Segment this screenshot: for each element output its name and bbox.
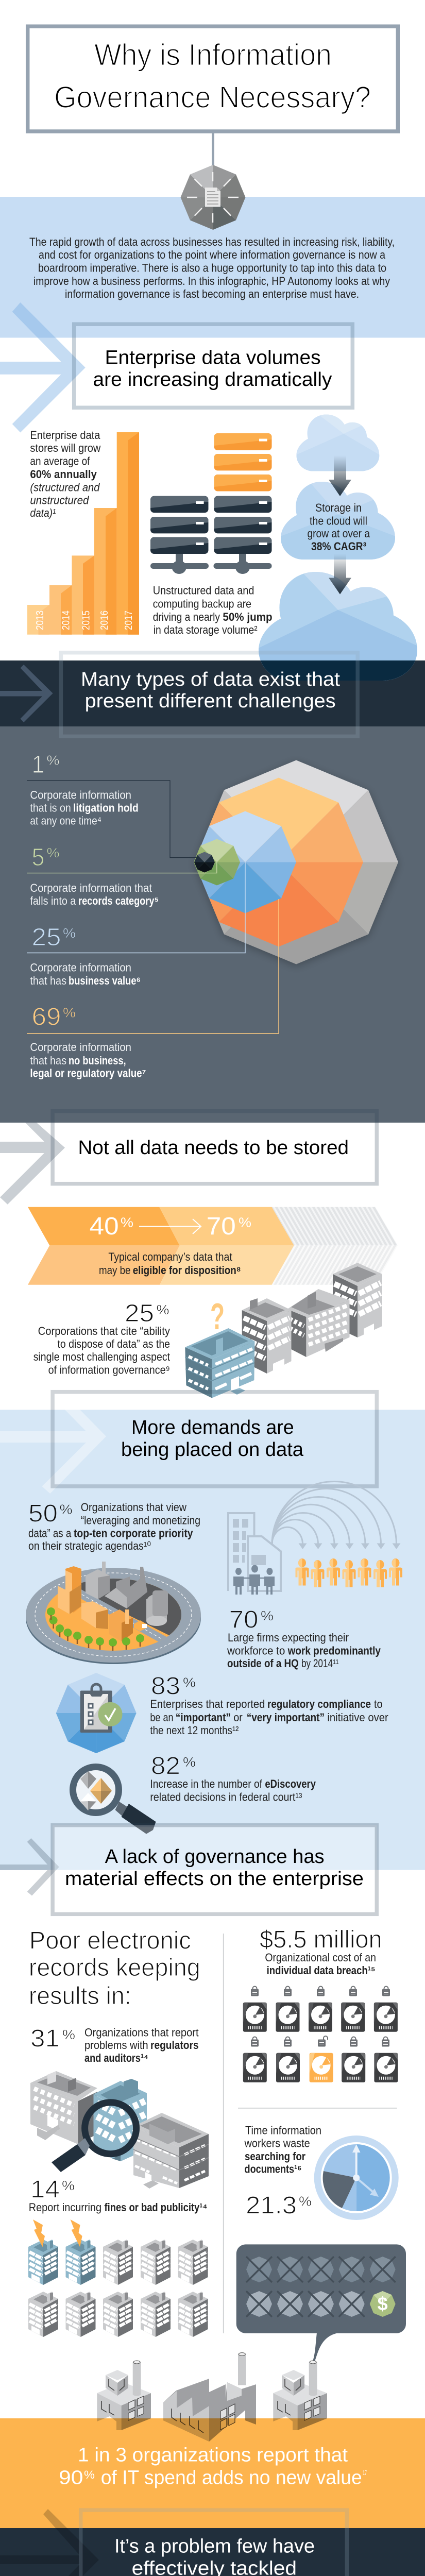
heading: enterprise data volumes [74, 324, 352, 408]
arrow: problem chevron [0, 2509, 99, 2576]
arrow: section 1 chevron [0, 302, 86, 433]
panel: dark header band few tackled [0, 2528, 425, 2576]
icon: right factory [273, 2361, 327, 2430]
stat: 50 percent monetizing data: Organizations that view [81, 1501, 186, 1514]
text: one in three organizations: 1 in 3 organizations report that [78, 2445, 348, 2466]
icon: mid factory [163, 2352, 256, 2442]
stat: 21.3 percent searching for documents: Time information [245, 2124, 321, 2137]
stat: 25 percent business value: Corporate information [30, 961, 131, 974]
stat: 1 percent litigation hold: Corporate information [30, 789, 131, 802]
icon: document octagon [180, 165, 245, 230]
stat: 82 percent eDiscovery: related decisions in federal court¹³ [150, 1790, 302, 1803]
chart: disposition chevron band 40 to 70 percent: % [239, 1215, 251, 1230]
stat: 25 percent ability to dispose: Corporations that cite “ability [38, 1325, 170, 1337]
stat: 31 percent regulators and auditors: regulators [150, 2039, 199, 2052]
panel: slate data types background [0, 726, 425, 1123]
stat: 69 percent no value: no business, [69, 1054, 126, 1067]
stat: 69 percent no value: % [63, 1005, 76, 1021]
chart: nested octagons of data types [194, 760, 398, 964]
icon: server stacks [150, 433, 272, 574]
stat: 50 percent monetizing data: top-ten corporate priority [74, 1527, 193, 1539]
stat: 31 percent regulators and auditors: Organizations that report [84, 2026, 199, 2039]
stat: 83 percent regulatory compliance: initiative over [327, 1711, 388, 1724]
icon: isometric office buildings with question mark [185, 1263, 382, 1398]
text: data stores growth: an average of [30, 454, 90, 468]
stat: 82 percent eDiscovery: eDiscovery [265, 1777, 316, 1790]
stat: 25 percent ability to dispose: of information governance⁹ [48, 1363, 170, 1376]
stat: 5.5 million data breach: $5.5 million [260, 1926, 382, 1954]
stat: 5.5 million data breach: individual data breach¹⁵ [267, 1964, 376, 1977]
stat: 31 percent regulators and auditors: 31 [30, 2025, 60, 2052]
text: data stores growth [30, 429, 100, 519]
text: storage in the cloud: grow at over a [307, 527, 370, 540]
intro paragraph: and cost for organizations to the point where information governance is now a [39, 248, 386, 261]
stat: 5 percent records category: % [46, 845, 60, 860]
text: unstructured data: 50% jump [223, 611, 273, 623]
stat: 50 percent monetizing data: data” as a [28, 1527, 72, 1539]
text: data stores growth: Enterprise data [30, 429, 100, 442]
heading: poor electronic records keeping [29, 1927, 200, 2010]
stat: 21.3 percent searching for documents [244, 2124, 321, 2219]
text: one in three organizations: 17 [363, 2469, 367, 2477]
panel: light blue demands background [0, 1410, 425, 1870]
stat: 50 percent monetizing data: 50 [28, 1500, 58, 1527]
heading: problem few have tackled: It’s a problem few have [114, 2536, 315, 2557]
text: data stores growth: data)¹ [30, 506, 56, 519]
heading: enterprise data volumes: are increasing dramatically [93, 369, 332, 391]
stat: 1 percent litigation hold: that is on [30, 802, 71, 815]
stat: 21.3 percent searching for documents: 21.3 [246, 2192, 297, 2219]
stat: 70 percent work outside HQ [227, 1606, 381, 1670]
panel: intro blue band [0, 197, 425, 338]
stat: 25 percent ability to dispose [33, 1300, 170, 1376]
text: one in three organizations [59, 2445, 367, 2489]
stat: 70 percent work outside HQ: workforce to [227, 1644, 285, 1657]
arrow: cloud 1 to cloud 2 [329, 455, 351, 496]
chart: disposition chevron band 40 to 70 percent: 40 [90, 1213, 119, 1240]
stat: 83 percent regulatory compliance: regulatory compliance [267, 1698, 371, 1710]
pictogram: ten buildings, two struck [28, 2219, 208, 2337]
stat: 5.5 million data breach: Organizational cost of an [265, 1951, 376, 1964]
stat: 25 percent ability to dispose: single most challenging aspect [33, 1350, 170, 1363]
title box: Governance Necessary? [54, 80, 371, 114]
stat: 70 percent work outside HQ: Large firms expecting their [228, 1631, 349, 1644]
stat: 1 percent litigation hold [27, 751, 196, 858]
stat: 69 percent no value: Corporate information [30, 1041, 131, 1054]
chart: data arcs from office to remote workers [228, 1481, 402, 1595]
chart: disposition chevron band 40 to 70 percent: % [121, 1215, 133, 1230]
stat: 83 percent regulatory compliance: the next 12 months¹² [150, 1724, 239, 1737]
stat: 14 percent fines or bad publicity: % [62, 2178, 75, 2193]
text: storage in the cloud [307, 501, 370, 553]
text: data stores growth: stores will grow [30, 442, 100, 454]
stat: 82 percent eDiscovery: Increase in the number of [150, 1777, 263, 1790]
stat: 14 percent fines or bad publicity: fines or bad publicity¹⁴ [104, 2201, 207, 2214]
stat: 70 percent work outside HQ: outside of a HQ [227, 1657, 299, 1670]
heading: lack of governance [53, 1825, 377, 1914]
text: unstructured data: Unstructured data and [153, 584, 254, 597]
stat: 82 percent eDiscovery: % [183, 1754, 196, 1770]
stat: 31 percent regulators and auditors: % [62, 2027, 75, 2042]
chart: clock pie [317, 2139, 395, 2216]
chart: disposition chevron band 40 to 70 percent [28, 1207, 398, 1285]
heading: many types of data: Many types of data exist that [81, 669, 340, 690]
heading: poor electronic records keeping: results in: [29, 1982, 131, 2010]
icon: magnifier with diamonds [73, 1767, 156, 1834]
stat: 69 percent no value [27, 899, 279, 1080]
text: storage in the cloud: Storage in [315, 501, 362, 514]
stat: 83 percent regulatory compliance: “important” [176, 1711, 231, 1724]
bar chart: stepped orange growth 2013-2017: 2015 [81, 611, 92, 630]
stat: 14 percent fines or bad publicity: Report incurring [29, 2201, 101, 2214]
text: unstructured data: driving a nearly [153, 611, 220, 623]
stat: 5.5 million data breach [260, 1926, 382, 1977]
stat: 25 percent business value [27, 862, 245, 987]
stat: 21.3 percent searching for documents: documents¹⁶ [244, 2163, 302, 2175]
stat: 83 percent regulatory compliance: % [183, 1674, 196, 1690]
stat: 25 percent ability to dispose: to dispose of data” as the [58, 1337, 170, 1350]
text: one in three organizations: of IT spend adds no new value [101, 2467, 362, 2489]
icon: left factory [97, 2361, 151, 2430]
stat: 25 percent business value: 25 [32, 924, 61, 951]
arrow: more demands chevron [0, 1379, 106, 1494]
stat: 83 percent regulatory compliance: Enterprises that reported [150, 1698, 265, 1710]
intro paragraph: boardroom imperative. There is also a huge opportunity to tap into this data to [38, 262, 386, 274]
bar chart: stepped orange growth 2013-2017 [27, 432, 139, 635]
stat: 1 percent litigation hold: % [46, 752, 60, 768]
stat: 1 percent litigation hold: at any one time⁴ [30, 814, 101, 827]
arrow: lack of governance chevron [0, 1838, 59, 1896]
icon: cloud small [296, 412, 379, 471]
text: unstructured data [153, 584, 273, 636]
arrow: cloud 2 to cloud 3 [329, 554, 351, 595]
chart: disposition chevron band 40 to 70 percent: may be [99, 1264, 131, 1277]
stat: 1 percent litigation hold: 1 [32, 751, 44, 778]
bar chart: stepped orange growth 2013-2017: 2017 [123, 611, 134, 630]
stat: 5 percent records category: records category⁵ [78, 894, 159, 907]
stat: 21.3 percent searching for documents: workers waste [244, 2137, 310, 2150]
bar chart: stepped orange growth 2013-2017: 2014 [61, 611, 72, 630]
title box: Why is Information [94, 38, 332, 72]
pictogram: locked hard drives, one unlocked [243, 1987, 398, 2082]
stat: 5 percent records category: Corporate information that [30, 882, 152, 894]
icon: cloud medium [281, 478, 395, 560]
stat: 70 percent work outside HQ: % [261, 1608, 274, 1623]
callout: IT spend speech bubble: $ [378, 2293, 388, 2314]
chart: disposition chevron band 40 to 70 percent: Typical company’s data that [108, 1250, 232, 1263]
text: data stores growth: (structured and [30, 481, 100, 494]
panel: dark header band many types [0, 660, 425, 726]
text: data stores growth: 60% annually [30, 468, 97, 481]
stat: 50 percent monetizing data: % [60, 1502, 73, 1517]
icon: isometric office buildings with question mark: ? [210, 1296, 225, 1337]
stat: 21.3 percent searching for documents: % [299, 2194, 312, 2209]
stat: 83 percent regulatory compliance [150, 1672, 388, 1737]
stat: 5 percent records category: 5 [32, 844, 44, 871]
bar chart: stepped orange growth 2013-2017: 2013 [35, 611, 46, 630]
heading: not all data needs to be stored: Not all data needs to be stored [78, 1137, 349, 1159]
stat: 70 percent work outside HQ: by 2014¹¹ [301, 1657, 339, 1670]
stat: 50 percent monetizing data: on their strategic agendas¹⁰ [28, 1539, 151, 1552]
intro paragraph: information governance is fast becoming an enterprise must have. [65, 287, 359, 300]
stat: 50 percent monetizing data [28, 1500, 200, 1552]
stat: 25 percent business value: business value⁶ [69, 974, 141, 987]
stat: 83 percent regulatory compliance: to [374, 1698, 383, 1710]
chart: disposition chevron band 40 to 70 percent: eligible for disposition⁸ [133, 1264, 241, 1277]
stat: 69 percent no value: that has [30, 1054, 66, 1067]
heading: lack of governance: A lack of governance has [105, 1846, 325, 1868]
stat: 83 percent regulatory compliance: or [233, 1711, 243, 1724]
bar chart: stepped orange growth 2013-2017: 2016 [99, 611, 110, 630]
stat: 70 percent work outside HQ: work predominantly [287, 1644, 381, 1657]
text: unstructured data: computing backup are [153, 598, 251, 610]
stat: 83 percent regulatory compliance: be an [150, 1711, 174, 1724]
stat: 25 percent ability to dispose: % [157, 1302, 169, 1317]
stat: 50 percent monetizing data: “leveraging and monetizing [81, 1514, 200, 1527]
stat: 31 percent regulators and auditors [30, 2025, 199, 2064]
stat: 25 percent business value: % [63, 925, 76, 941]
icon: buildings under magnifier [30, 2071, 209, 2189]
stat: 5 percent records category: falls into a [30, 894, 76, 907]
text: one in three organizations: 90 [59, 2467, 83, 2489]
stat: 83 percent regulatory compliance: 83 [151, 1672, 180, 1700]
heading: more demands: More demands are [131, 1417, 294, 1438]
arrow: many types chevron [0, 665, 53, 722]
icon: cloud large [259, 566, 417, 681]
stat: 82 percent eDiscovery [150, 1753, 316, 1803]
heading: many types of data: present different challenges [85, 690, 336, 712]
title box [28, 26, 398, 131]
text: storage in the cloud: 38% CAGR³ [311, 540, 366, 553]
callout: IT spend speech bubble [236, 2244, 406, 2363]
panel: orange band [0, 2418, 425, 2528]
stat: 31 percent regulators and auditors: problems with [84, 2039, 148, 2052]
intro paragraph [29, 235, 395, 300]
text: unstructured data: in data storage volume² [154, 623, 258, 636]
stat: 82 percent eDiscovery: 82 [151, 1753, 180, 1780]
arrow: not all data chevron [0, 1123, 65, 1205]
stat: 21.3 percent searching for documents: searching for [245, 2150, 305, 2163]
text: storage in the cloud: the cloud will [310, 514, 367, 528]
heading: more demands [53, 1392, 377, 1486]
stat: 5 percent records category [27, 844, 217, 907]
heading: enterprise data volumes: Enterprise data volumes [105, 347, 321, 369]
stat: 69 percent no value: 69 [32, 1004, 61, 1030]
stat: 1 percent litigation hold: litigation hold [73, 802, 139, 815]
stat: 70 percent work outside HQ: 70 [229, 1606, 259, 1634]
icon: clipboard checklist octagon [56, 1673, 137, 1753]
stat: 83 percent regulatory compliance: “very important” [247, 1711, 325, 1724]
heading: poor electronic records keeping: records keeping [29, 1954, 200, 1981]
text: data stores growth: unstructured [30, 494, 89, 506]
heading: more demands: being placed on data [121, 1439, 304, 1461]
stat: 31 percent regulators and auditors: and auditors¹⁴ [84, 2052, 148, 2064]
heading: not all data needs to be stored [53, 1111, 377, 1184]
icon: isometric city disc [26, 1562, 201, 1664]
connector stem [212, 133, 214, 166]
heading: lack of governance: material effects on the enterprise [65, 1868, 364, 1890]
text: one in three organizations: % [84, 2468, 95, 2481]
stat: 14 percent fines or bad publicity [29, 2176, 208, 2214]
chart: disposition chevron band 40 to 70 percent: 70 [207, 1213, 236, 1240]
stat: 25 percent business value: that has [30, 974, 66, 987]
heading: many types of data [61, 653, 358, 736]
stat: 25 percent ability to dispose: 25 [125, 1300, 154, 1327]
heading: problem few have tackled [81, 2510, 347, 2576]
stat: 69 percent no value: legal or regulatory value⁷ [30, 1067, 146, 1080]
heading: poor electronic records keeping: Poor electronic [29, 1927, 191, 1955]
stat: 14 percent fines or bad publicity: 14 [30, 2176, 60, 2204]
